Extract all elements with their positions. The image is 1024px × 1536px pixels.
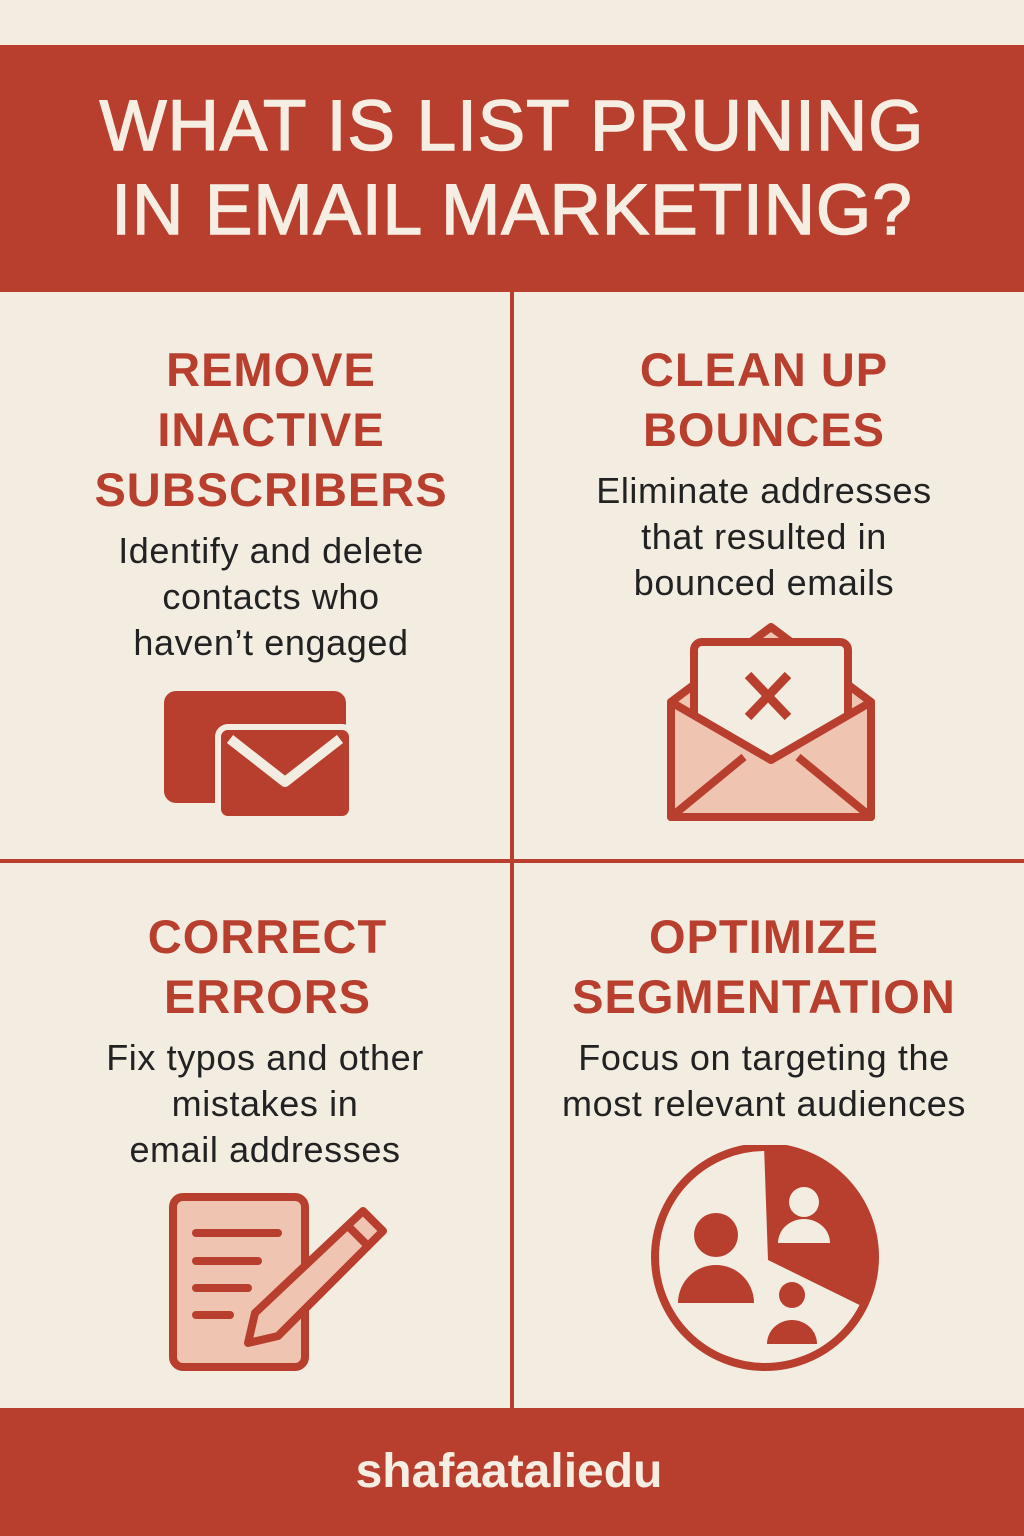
text: that resulted in [641,516,887,557]
heading: INACTIVE [157,403,385,456]
icon: envelope stack [164,691,349,816]
heading [572,910,956,1023]
heading [640,343,888,456]
heading: CLEAN UP [640,343,888,396]
text: Eliminate addresses [596,470,932,511]
text [106,1037,424,1170]
heading: CORRECT [148,910,387,963]
panel: remove inactive subscribers [94,343,448,816]
heading: SUBSCRIBERS [94,463,448,516]
text: Focus on targeting the [578,1037,950,1078]
heading [148,910,387,1023]
text: most relevant audiences [562,1083,966,1124]
footer band [0,1408,1024,1536]
text: mistakes in [172,1083,358,1124]
footer text: shafaataliedu [356,1445,662,1498]
text [596,470,932,603]
title: WHAT IS LIST PRUNING [100,87,924,166]
panel: correct errors [106,910,424,1371]
heading: SEGMENTATION [572,970,956,1023]
icon: document with pencil [169,1193,387,1371]
panel: optimize segmentation [562,910,966,1371]
panel: clean up bounces [596,343,932,821]
heading: BOUNCES [643,403,885,456]
text: bounced emails [634,562,894,603]
header band [0,45,1024,292]
icon: segmentation pie [651,1145,879,1371]
text: contacts who [162,576,380,617]
text [118,530,424,663]
title: IN EMAIL MARKETING? [111,171,913,250]
heading [94,343,448,516]
icon: envelope with x [667,622,875,821]
heading: ERRORS [164,970,371,1023]
grid dividers [510,292,514,1408]
text [562,1037,966,1124]
text: haven’t engaged [133,622,409,663]
heading: REMOVE [166,343,376,396]
text: email addresses [129,1129,401,1170]
text: Fix typos and other [106,1037,424,1078]
title [99,87,924,250]
text: Identify and delete [118,530,424,571]
heading: OPTIMIZE [649,910,879,963]
